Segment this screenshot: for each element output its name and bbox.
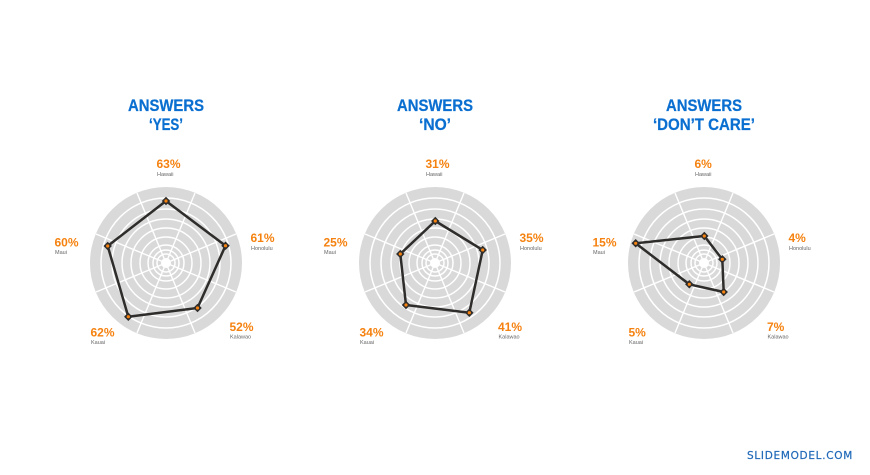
label: Kauai 5%: Kauai xyxy=(629,340,643,346)
panel: answers no xyxy=(324,97,544,346)
heading: answers no: ANSWERS xyxy=(397,97,473,115)
label: Honolulu 35%: 35% xyxy=(520,231,544,245)
heading: answers don't care xyxy=(653,97,755,134)
heading: answers no: ‘NO’ xyxy=(419,116,451,134)
label: Maui 15% xyxy=(592,236,617,256)
label: Hawaii 63%: 63% xyxy=(156,157,181,171)
label: Maui 25% xyxy=(324,236,348,256)
label: Honolulu 4% xyxy=(788,231,811,252)
label: Kauai 5%: 5% xyxy=(628,326,646,340)
label: Maui 60%: 60% xyxy=(54,236,79,250)
label: Maui 25%: 25% xyxy=(324,236,348,250)
label: Hawaii 6%: Hawaii xyxy=(695,172,712,178)
radar data: don't care xyxy=(631,232,728,296)
radar data: no xyxy=(396,217,487,317)
brand: slidemodel.com: SLIDEMODEL.COM xyxy=(747,450,853,462)
heading: answers no xyxy=(397,97,473,134)
radar grid: yes xyxy=(90,187,242,339)
heading: answers yes: ‘YES’ xyxy=(149,116,183,134)
label: Honolulu 61%: Honolulu xyxy=(251,246,273,252)
panel: answers don't care xyxy=(592,97,811,346)
label: Maui 25%: Maui xyxy=(324,250,336,256)
label: Honolulu 4%: Honolulu xyxy=(789,246,811,252)
label: Honolulu 35%: Honolulu xyxy=(520,246,542,252)
label: Hawaii 31%: 31% xyxy=(426,157,450,171)
label: Hawaii 31% xyxy=(426,157,450,178)
label: Kauai 62%: Kauai xyxy=(91,340,105,346)
label: Maui 15%: 15% xyxy=(592,236,617,250)
heading: answers yes: ANSWERS xyxy=(128,97,204,115)
label: Hawaii 63%: Hawaii xyxy=(157,172,174,178)
label: Kalawao 52% xyxy=(230,320,254,340)
label: Maui 60%: Maui xyxy=(55,250,67,256)
label: Hawaii 31%: Hawaii xyxy=(426,172,443,178)
label: Kalawao 41%: Kalawao xyxy=(498,334,520,340)
label: Kauai 34%: Kauai xyxy=(360,340,374,346)
panel: answers yes xyxy=(54,97,275,346)
heading: answers yes xyxy=(128,97,204,134)
label: Honolulu 61%: 61% xyxy=(250,231,275,245)
label: Kalawao 41% xyxy=(498,320,522,340)
label: Kalawao 41%: 41% xyxy=(498,320,522,334)
label: Kauai 5% xyxy=(628,326,646,346)
label: Hawaii 63% xyxy=(156,157,181,178)
label: Kalawao 52%: 52% xyxy=(230,320,254,334)
heading: answers don't care: ‘DON’T CARE’ xyxy=(653,116,755,134)
label: Kalawao 7%: 7% xyxy=(767,320,785,334)
label: Maui 60% xyxy=(54,236,79,256)
label: Kauai 34%: 34% xyxy=(360,326,384,340)
radar data: yes xyxy=(103,197,230,321)
label: Honolulu 35% xyxy=(520,231,544,252)
label: Hawaii 6% xyxy=(694,157,712,178)
label: Hawaii 6%: 6% xyxy=(694,157,712,171)
label: Kauai 62%: 62% xyxy=(90,326,115,340)
label: Kalawao 7%: Kalawao xyxy=(768,334,789,340)
label: Kauai 34% xyxy=(360,326,384,346)
label: Honolulu 61% xyxy=(250,231,275,252)
label: Maui 15%: Maui xyxy=(593,250,605,256)
radar grid: don't care xyxy=(628,187,780,339)
label: Kalawao 52%: Kalawao xyxy=(230,334,251,340)
label: Kalawao 7% xyxy=(767,320,789,340)
radar grid: no xyxy=(359,187,511,339)
label: Kauai 62% xyxy=(90,326,115,346)
label: Honolulu 4%: 4% xyxy=(788,231,806,245)
heading: answers don't care: ANSWERS xyxy=(666,97,742,115)
